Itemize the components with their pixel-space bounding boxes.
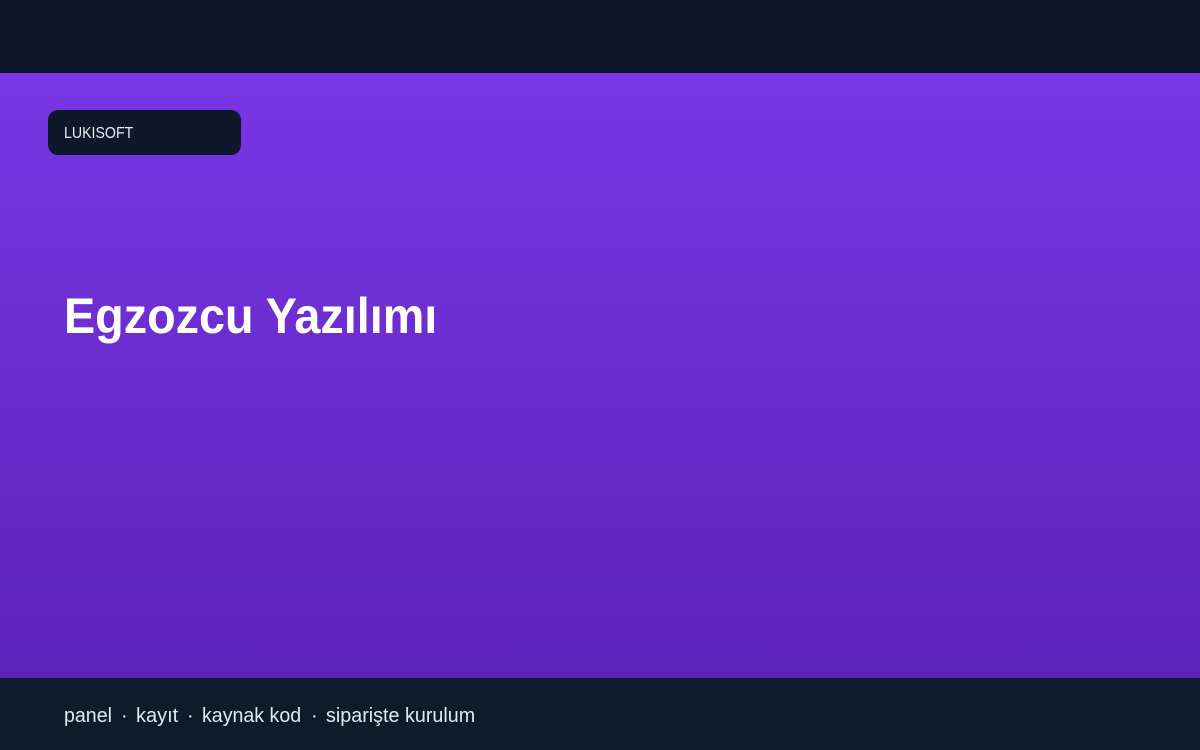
footer bar bbox=[0, 678, 1200, 750]
footer links: panel bbox=[64, 705, 112, 727]
footer links: · bbox=[121, 705, 128, 727]
title: Egzozcu Yazılımı bbox=[64, 288, 437, 344]
footer links: kaynak kod bbox=[202, 705, 301, 727]
brand name: LUKISOFT bbox=[64, 125, 133, 142]
footer links bbox=[64, 705, 475, 727]
footer links: · bbox=[311, 705, 318, 727]
brand badge bbox=[48, 110, 241, 155]
footer links: · bbox=[187, 705, 194, 727]
footer links: kayıt bbox=[136, 705, 178, 727]
footer links: siparişte kurulum bbox=[326, 705, 475, 727]
top bar bbox=[0, 0, 1200, 73]
